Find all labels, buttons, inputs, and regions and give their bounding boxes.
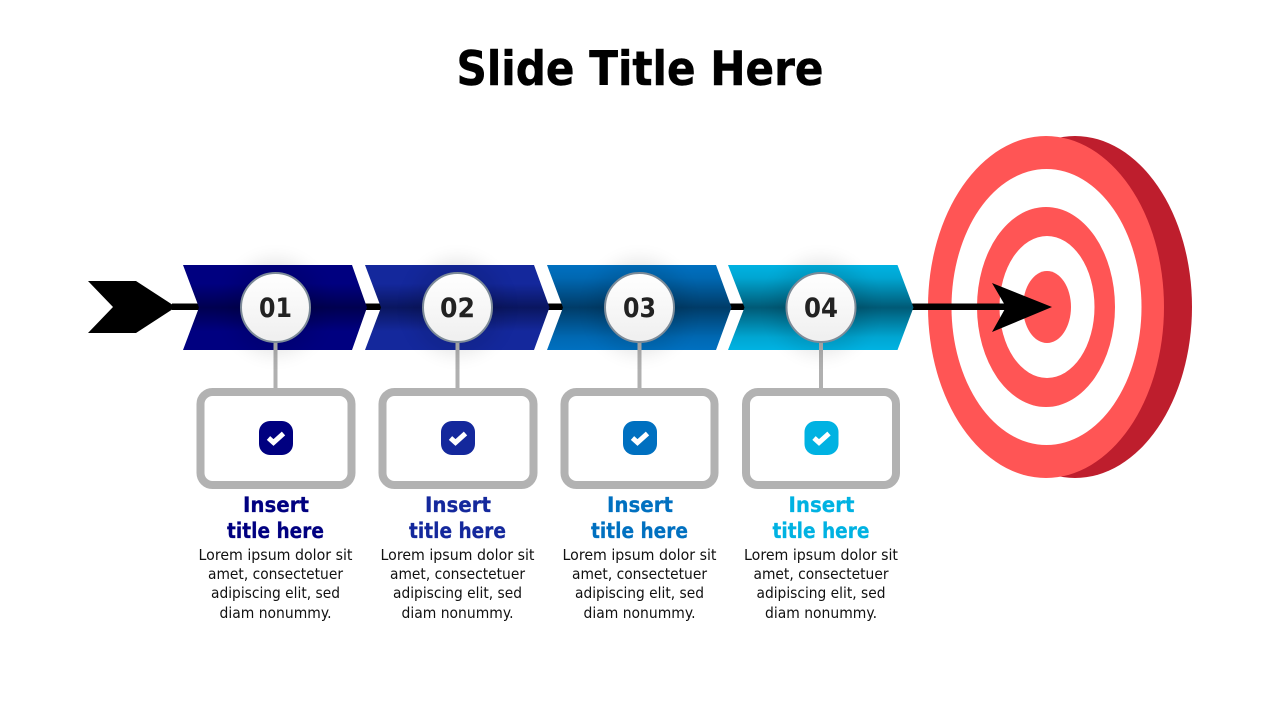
heading 1: Insert: [243, 493, 309, 517]
heading 4: [772, 493, 870, 543]
heading 1: title here: [227, 519, 324, 543]
number badge 2: [412, 259, 504, 355]
icon: target: [928, 136, 1192, 478]
arrow: fletching and shaft: [88, 281, 1052, 333]
heading 2: title here: [409, 519, 506, 543]
body text 1: diam nonummy.: [220, 604, 332, 622]
body text 4: amet, consectetuer: [754, 565, 889, 583]
number badge 3: 03: [623, 293, 656, 324]
number badge 2: 02: [440, 293, 475, 324]
heading 3: [591, 493, 688, 543]
panel: step 4: [728, 259, 914, 622]
connector 4: [819, 342, 823, 390]
icon: check 1: [259, 421, 293, 455]
body text 3: amet, consectetuer: [572, 565, 708, 583]
text box 1: [200, 392, 352, 485]
connector 3: [638, 342, 642, 390]
number badge 3: [594, 259, 686, 355]
icon: check 4: [804, 421, 838, 455]
icon: check 3: [623, 421, 657, 455]
body text 2: amet, consectetuer: [390, 565, 526, 583]
body text 4: diam nonummy.: [765, 604, 877, 622]
number badge 1: [230, 259, 322, 355]
number badge 4: 04: [804, 293, 838, 324]
number badge 1: 01: [259, 293, 292, 324]
icon: check 2: [441, 421, 475, 455]
body text 3: adipiscing elit, sed: [575, 584, 704, 602]
body text 4: adipiscing elit, sed: [756, 584, 886, 602]
heading 3: title here: [591, 519, 688, 543]
body text 1: adipiscing elit, sed: [211, 584, 340, 602]
heading 2: Insert: [425, 493, 491, 517]
body text 1: amet, consectetuer: [208, 565, 344, 583]
panel: step 2: [365, 259, 550, 622]
body text 4: Lorem ipsum dolor sit: [744, 546, 898, 564]
heading 2: [409, 493, 506, 543]
body text 1: Lorem ipsum dolor sit: [198, 546, 352, 564]
body text 1: [198, 546, 352, 622]
body text 2: [380, 546, 534, 622]
heading 4: title here: [772, 519, 870, 543]
text box 3: [564, 392, 714, 485]
connector 2: [456, 342, 460, 390]
chevron 4: [728, 265, 914, 350]
heading 4: Insert: [788, 493, 854, 517]
number badge 4: [775, 259, 867, 355]
connector 1: [274, 342, 278, 390]
body text 2: diam nonummy.: [402, 604, 514, 622]
body text 2: adipiscing elit, sed: [393, 584, 522, 602]
panel: step 3: [547, 259, 732, 622]
body text 3: [562, 546, 716, 622]
chevron 2: [365, 265, 550, 350]
chevron 1: [183, 265, 367, 350]
body text 3: diam nonummy.: [584, 604, 696, 622]
body text 4: [744, 546, 898, 622]
title: Slide Title Here: [456, 42, 824, 97]
text box 4: [746, 392, 896, 485]
panel: step 1: [183, 259, 367, 622]
body text 2: Lorem ipsum dolor sit: [380, 546, 534, 564]
body text 3: Lorem ipsum dolor sit: [562, 546, 716, 564]
chevron 3: [547, 265, 732, 350]
heading 3: Insert: [607, 493, 673, 517]
text box 2: [382, 392, 534, 485]
heading 1: [227, 493, 324, 543]
